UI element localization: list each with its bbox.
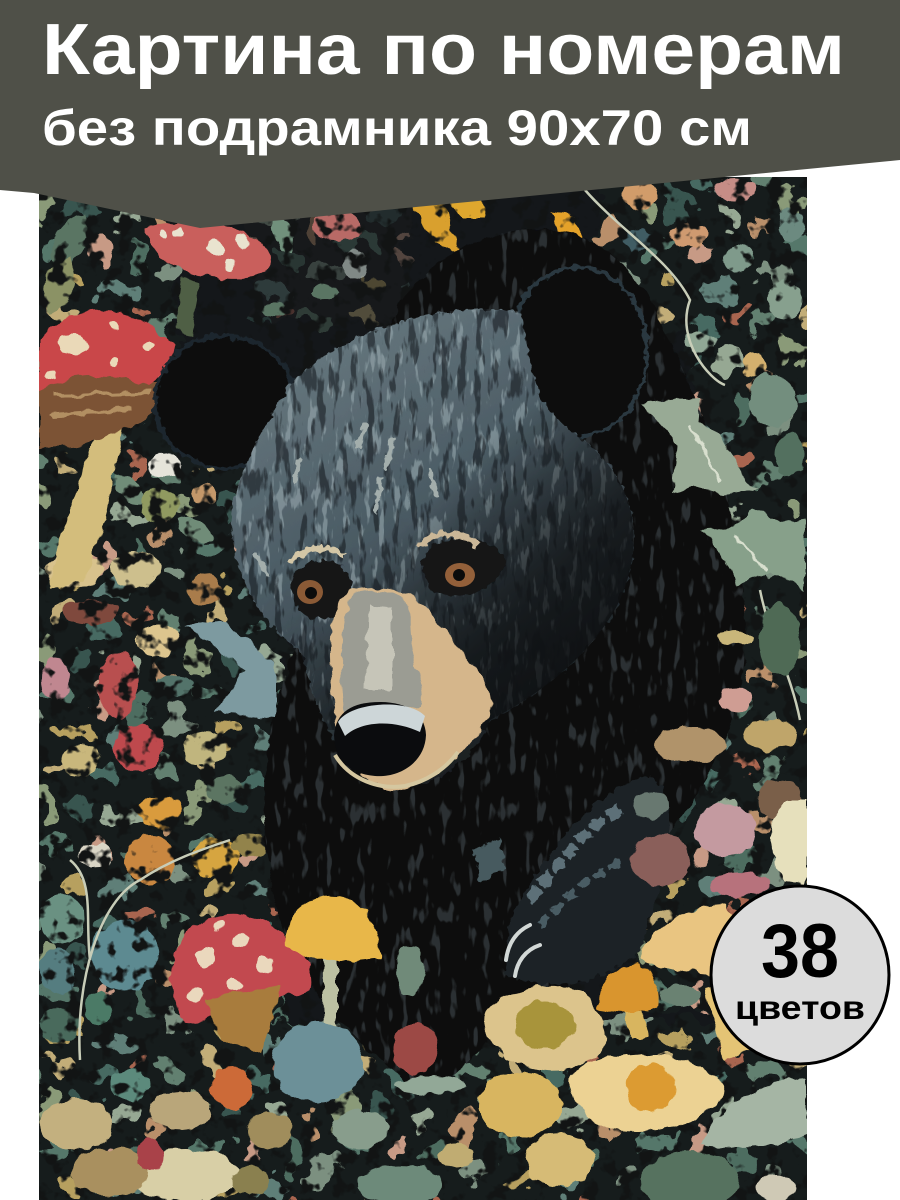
flowers: right middle [630, 688, 807, 897]
header banner [0, 0, 900, 228]
blue-grey leaf beside bear [185, 620, 275, 718]
ivy leaves: right [640, 374, 805, 676]
bear fur highlights [255, 425, 436, 575]
bear nose [334, 702, 426, 776]
mushrooms: right cluster [478, 905, 807, 1200]
bear body fur [260, 210, 760, 1090]
top flowers and orange leaves [312, 178, 803, 390]
bear eyes [297, 563, 475, 604]
foliage: lower-left blue leaves [40, 892, 159, 1101]
badge: 38 colours [711, 886, 889, 1064]
title: Картина по номерам [42, 10, 845, 90]
leaves and flowers: bottom-left [39, 1090, 294, 1200]
mushroom: bottom red [171, 914, 312, 1055]
bear paw [474, 775, 670, 984]
painting [39, 177, 807, 1200]
foliage: upper-left leaves [36, 207, 340, 549]
badge: 38 colours: 38 [761, 909, 839, 994]
bear head [231, 309, 634, 787]
bear ear: left [155, 336, 295, 468]
leaves: bottom centre [212, 944, 473, 1200]
mushroom: left red with stem [39, 311, 175, 590]
bear body [264, 229, 745, 1090]
stems [70, 190, 800, 1060]
bear brows and eye patches [290, 534, 505, 620]
bear mouth [335, 752, 458, 787]
foliage: left middle flowers [41, 453, 268, 884]
bear fur strands [225, 300, 645, 730]
bear snout [330, 588, 490, 790]
painting background [164, 189, 716, 1026]
subtitle: без подрамника 90х70 см [42, 100, 752, 156]
bear ear: right [509, 267, 647, 437]
mushroom: yellow [285, 896, 380, 1030]
foliage: mottled bands [39, 177, 807, 1200]
badge: 38 colours: цветов [735, 989, 865, 1026]
dark gaps between foliage [39, 177, 807, 1200]
mushroom: top red [145, 222, 273, 335]
bear claws [506, 925, 540, 976]
